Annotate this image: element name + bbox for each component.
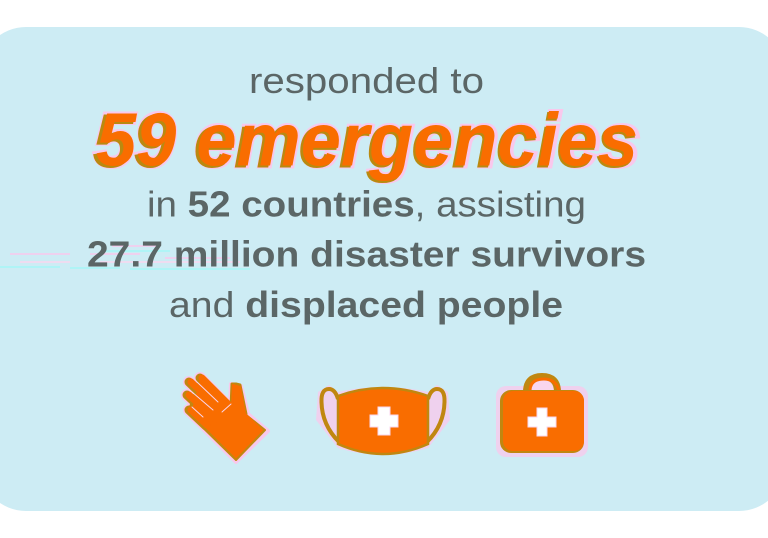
text: responded to: responded to: [249, 60, 484, 101]
text: in 52 countries, assisting: in 52 countries , assisting: [147, 184, 586, 224]
heading: 59 emergencies: 59 emergencies: [96, 98, 638, 182]
heading: 59 emergencies: 59 emergencies: [94, 98, 640, 182]
icon: first aid kit: [496, 376, 588, 457]
icon: glove: [186, 376, 268, 462]
text: and displaced people: and displaced people: [169, 284, 563, 325]
text: 27.7 million disaster survivors: 27.7 million disaster survivors: [87, 234, 646, 274]
heading: 59 emergencies: 59 emergencies: [93, 99, 637, 183]
icon: face mask: [316, 385, 450, 455]
